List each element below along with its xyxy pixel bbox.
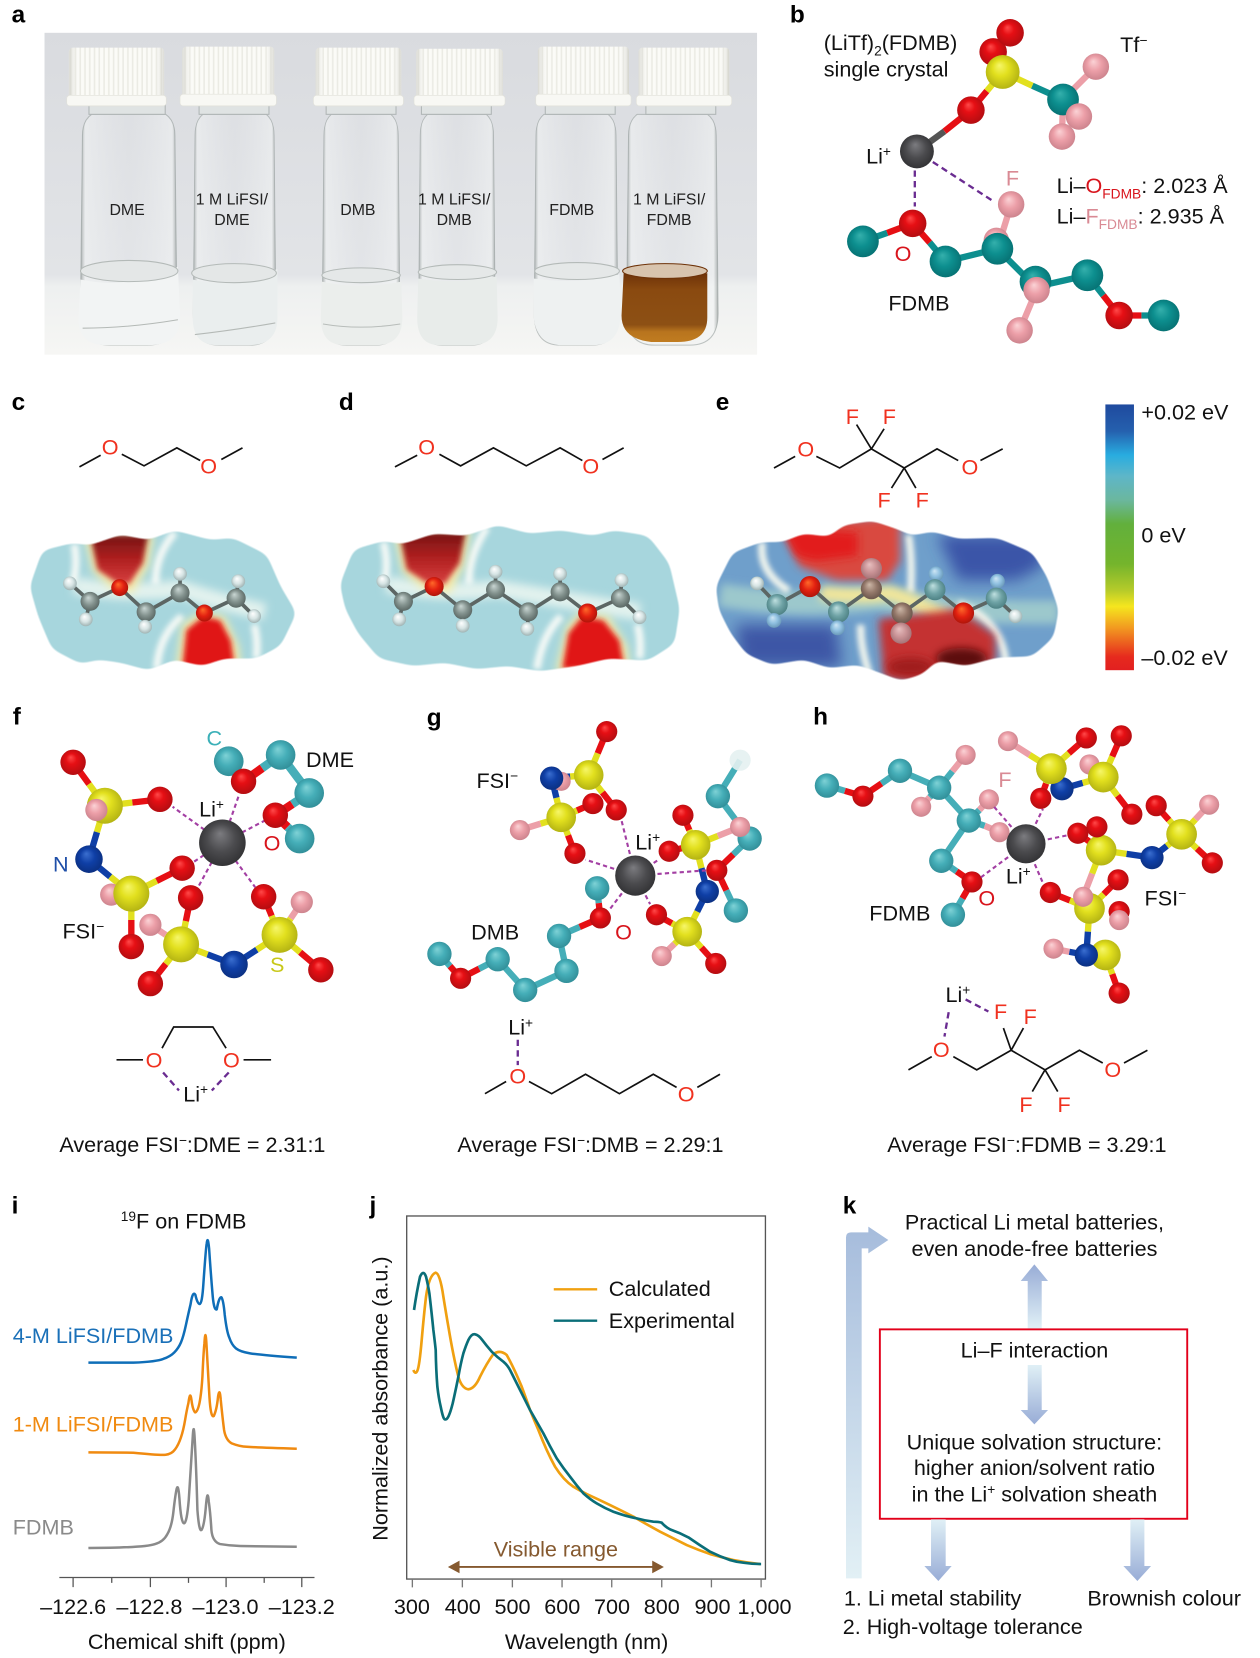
flow text: higher anion/solvent ratio	[914, 1455, 1155, 1480]
labels: : 2.935 Å	[1138, 204, 1225, 229]
labels: single crystal	[824, 57, 948, 82]
labels: (FDMB)	[882, 30, 957, 55]
atom labels: C	[207, 726, 222, 751]
panel h: FDMB solvation structure	[813, 704, 1223, 1157]
labels: (LiTf)	[824, 30, 874, 55]
panel letter g: g	[427, 705, 442, 732]
red box	[880, 1329, 1187, 1519]
atom labels: F	[998, 767, 1012, 792]
ratio caption h: :FDMB = 3.29:1	[1015, 1132, 1167, 1157]
FDMB atoms	[847, 191, 1179, 344]
x tick labels: 500	[494, 1594, 530, 1619]
atom labels: O	[615, 919, 632, 944]
x tick labels: 700	[594, 1594, 630, 1619]
photo background	[45, 33, 757, 355]
labels: +	[883, 144, 891, 159]
atom labels: N	[53, 852, 69, 877]
colour scale legend: +0.02 eV	[1141, 400, 1229, 425]
x tick labels: 1,000	[737, 1594, 791, 1619]
atom labels: O	[264, 830, 280, 855]
atom labels: +	[1023, 864, 1031, 879]
FDMB atoms	[750, 558, 1022, 644]
bonds	[827, 736, 1212, 993]
panel b: single crystal structure	[790, 2, 1228, 344]
FDMB skeletal formula: F	[883, 404, 896, 429]
DMB atoms	[376, 565, 646, 636]
DMB skeletal formula	[395, 435, 624, 479]
ratio caption f: Average FSI	[59, 1132, 179, 1157]
panel letter f: f	[13, 704, 22, 731]
FSI atoms	[998, 725, 1223, 1004]
vial: 1 M LiFSI/DME: 1 M LiFSI/	[196, 192, 269, 209]
labels: Li–O	[1057, 173, 1102, 198]
x axis: –122.6	[40, 1594, 106, 1619]
panel g: DMB solvation structure	[427, 705, 762, 1157]
FDMB Li scheme: F	[994, 999, 1007, 1024]
labels: −	[1139, 33, 1147, 48]
Li atom	[1006, 824, 1046, 863]
Li coordination dashes	[173, 794, 267, 887]
atom labels: FDMB	[869, 900, 930, 925]
vial: 1 M LiFSI/DMB: 1 M LiFSI/	[418, 192, 491, 209]
atom labels: +	[216, 797, 224, 812]
labels: Li	[866, 143, 883, 168]
atom labels: Li	[635, 829, 652, 854]
atom labels: FSI	[63, 918, 96, 943]
DMB skeletal formula: O	[582, 454, 599, 479]
flow text: even anode-free batteries	[911, 1236, 1158, 1261]
atom labels: −	[96, 919, 104, 934]
Li coordination dashes	[980, 806, 1067, 883]
DMB Li scheme	[485, 1015, 720, 1106]
flow text: solvation sheath	[995, 1482, 1157, 1507]
NMR curves	[88, 1240, 297, 1548]
atom labels: FSI	[476, 768, 510, 793]
labels: F	[1006, 166, 1019, 191]
FDMB Li scheme: Li	[946, 982, 962, 1007]
flow text: Li–F interaction	[961, 1338, 1108, 1363]
panel j: absorbance chart	[368, 1193, 791, 1654]
legend: Experimental	[609, 1308, 735, 1333]
colour scale legend	[1105, 400, 1229, 670]
x tick labels: 300	[394, 1594, 430, 1619]
down arrow right	[1123, 1519, 1151, 1581]
vial: 1 M LiFSI/DMB: DMB	[437, 212, 472, 229]
bonds	[439, 732, 750, 990]
absorbance curves	[413, 1273, 761, 1564]
Li coordination dashes	[915, 162, 993, 206]
flow text: +	[987, 1482, 995, 1497]
vial: 1 M LiFSI/DMB	[414, 49, 505, 345]
x axis title: Wavelength (nm)	[505, 1629, 668, 1654]
DME chelation scheme: O	[223, 1048, 240, 1073]
panel f: DME solvation structure	[13, 704, 354, 1157]
panel k: mechanism flow diagram	[843, 1193, 1241, 1639]
vial: DME	[67, 48, 180, 345]
FSI and DME atoms	[60, 740, 334, 996]
x tick labels: 900	[695, 1594, 731, 1619]
labels: Tf	[1120, 32, 1139, 57]
vial: 1 M LiFSI/FDMB brown: 1 M LiFSI/	[633, 192, 706, 209]
panel letter d: d	[339, 389, 354, 416]
up arrow	[1021, 1264, 1048, 1328]
vial: FDMB: FDMB	[549, 202, 594, 219]
panel letter j: j	[369, 1193, 376, 1220]
vial: 1 M LiFSI/FDMB brown: FDMB	[647, 212, 692, 229]
ratio caption g: −	[577, 1133, 585, 1148]
atom labels: S	[270, 952, 284, 977]
DME skeletal formula: O	[200, 454, 217, 479]
FSI and DMB atoms	[427, 721, 762, 1002]
panel letter a: a	[12, 2, 26, 29]
spectrum labels	[13, 1323, 173, 1539]
FDMB Li scheme: O	[1104, 1057, 1121, 1082]
labels: FDMB	[1102, 186, 1141, 201]
FDMB Li scheme: +	[962, 982, 970, 997]
x tick labels: 600	[544, 1594, 580, 1619]
panel letter k: k	[843, 1193, 857, 1220]
x tick labels: 400	[445, 1594, 481, 1619]
vial: 1 M LiFSI/DME: DME	[214, 212, 250, 229]
atom labels: DME	[306, 747, 354, 772]
DME skeletal formula: O	[102, 435, 119, 460]
DMB skeletal formula: O	[418, 435, 435, 460]
vial: DME: DME	[109, 202, 145, 219]
FDMB Li scheme	[908, 982, 1147, 1117]
atom labels	[869, 767, 1186, 925]
colour scale legend: –0.02 eV	[1141, 645, 1228, 670]
legend	[554, 1276, 735, 1333]
labels	[824, 30, 1228, 316]
FDMB skeletal formula: F	[878, 487, 891, 512]
DME chelation scheme: +	[200, 1082, 208, 1097]
spectrum labels: 4-M LiFSI/FDMB	[13, 1323, 173, 1348]
atom labels: Li	[1006, 863, 1023, 888]
ratio caption g: Average FSI	[457, 1132, 577, 1157]
FDMB skeletal formula: F	[916, 487, 929, 512]
panel i: NMR spectra	[12, 1193, 335, 1654]
bonds	[73, 755, 321, 984]
colour scale legend: 0 eV	[1141, 522, 1186, 547]
vial: DMB	[313, 48, 403, 345]
vial: 1 M LiFSI/FDMB brown	[622, 48, 732, 345]
DME chelation scheme	[117, 1027, 271, 1106]
outcome text: 2. High-voltage tolerance	[843, 1614, 1083, 1639]
atom labels: −	[1178, 886, 1186, 901]
electrostatic potential surface	[340, 526, 680, 672]
panel letter i: i	[12, 1193, 18, 1220]
labels: O	[895, 241, 911, 266]
ratio caption h: −	[1007, 1133, 1015, 1148]
FDMB atoms	[815, 745, 1010, 927]
atom labels: O	[978, 886, 995, 911]
elbow arrow	[846, 1227, 888, 1578]
panel letter c: c	[12, 389, 25, 416]
bonds	[863, 61, 1164, 330]
Li coordination dashes	[586, 821, 707, 911]
spectrum labels: 1-M LiFSI/FDMB	[13, 1412, 173, 1437]
x axis title: Chemical shift (ppm)	[88, 1629, 286, 1654]
atom labels	[53, 726, 354, 977]
spectrum title: 19	[121, 1209, 136, 1224]
ratio caption g: :DMB = 2.29:1	[585, 1132, 724, 1157]
panel letter b: b	[790, 2, 805, 29]
labels: FDMB	[1099, 217, 1138, 232]
FDMB skeletal formula: O	[961, 455, 978, 480]
chart frame and ticks	[407, 1216, 765, 1587]
FDMB skeletal formula: O	[797, 437, 814, 462]
DMB Li scheme: +	[525, 1015, 533, 1030]
electrostatic potential surface	[709, 517, 1064, 683]
Tf anion atoms	[957, 19, 1109, 150]
panel d: DMB structure and potential map	[334, 389, 683, 683]
panel c: DME structure and potential map	[12, 389, 307, 678]
panel e: FDMB structure and potential map	[709, 389, 1064, 683]
atom labels: FSI	[1145, 886, 1178, 911]
labels: 2	[874, 43, 882, 58]
atom labels: DMB	[471, 919, 519, 944]
FDMB Li scheme: F	[1019, 1092, 1033, 1117]
atom labels: −	[510, 769, 518, 784]
visible range arrow	[448, 1537, 664, 1573]
x tick labels: 800	[644, 1594, 680, 1619]
ratio caption f: :DME = 2.31:1	[187, 1132, 325, 1157]
labels: FDMB	[888, 291, 949, 316]
panel a: vial photograph	[12, 2, 757, 355]
y axis title: Normalized absorbance (a.u.)	[368, 1256, 393, 1541]
x axis: –122.8	[116, 1594, 182, 1619]
vial: FDMB	[534, 47, 631, 345]
DMB Li scheme: Li	[508, 1015, 525, 1040]
vial: DMB: DMB	[340, 202, 376, 219]
flow text: in the Li	[912, 1482, 987, 1507]
visible range arrow: Visible range	[494, 1537, 618, 1562]
FDMB Li scheme: F	[1024, 1004, 1037, 1029]
outcome text: 1. Li metal stability	[844, 1585, 1022, 1610]
FDMB Li scheme: O	[933, 1037, 950, 1062]
labels: : 2.023 Å	[1141, 173, 1228, 198]
DMB Li scheme: O	[509, 1063, 526, 1088]
x axis	[40, 1578, 335, 1619]
outcome text: Brownish colour	[1087, 1585, 1241, 1610]
legend: Calculated	[609, 1276, 711, 1301]
panel letter h: h	[813, 704, 828, 731]
DME chelation scheme: Li	[183, 1081, 200, 1106]
ratio caption h: Average FSI	[887, 1132, 1007, 1157]
FDMB skeletal formula	[774, 404, 1003, 512]
FDMB skeletal formula: F	[846, 404, 859, 429]
x axis: –123.2	[269, 1594, 335, 1619]
x axis: –123.0	[193, 1594, 259, 1619]
labels: Li–F	[1057, 204, 1099, 229]
spectrum labels: FDMB	[13, 1514, 74, 1539]
down arrow left	[924, 1519, 952, 1581]
DME skeletal formula	[79, 435, 242, 479]
DME chelation scheme: O	[146, 1048, 162, 1073]
atom labels: +	[652, 830, 660, 845]
spectrum title: F on FDMB	[136, 1208, 246, 1233]
ratio caption f: −	[179, 1133, 187, 1148]
DMB Li scheme: O	[678, 1081, 695, 1106]
outcome text	[843, 1585, 1241, 1639]
DME atoms	[63, 567, 261, 634]
atom labels	[471, 768, 660, 944]
vial: 1 M LiFSI/DME	[180, 47, 277, 345]
down arrow inside box	[1021, 1365, 1048, 1424]
flow text: Unique solvation structure:	[907, 1430, 1162, 1455]
panel letter e: e	[716, 389, 729, 416]
electrostatic potential surface	[30, 531, 295, 670]
flow text	[905, 1210, 1164, 1507]
atom labels: Li	[199, 797, 216, 822]
flow text: Practical Li metal batteries,	[905, 1210, 1164, 1235]
Li atom	[900, 134, 934, 168]
x tick labels	[394, 1594, 791, 1619]
FDMB Li scheme: F	[1057, 1092, 1071, 1117]
